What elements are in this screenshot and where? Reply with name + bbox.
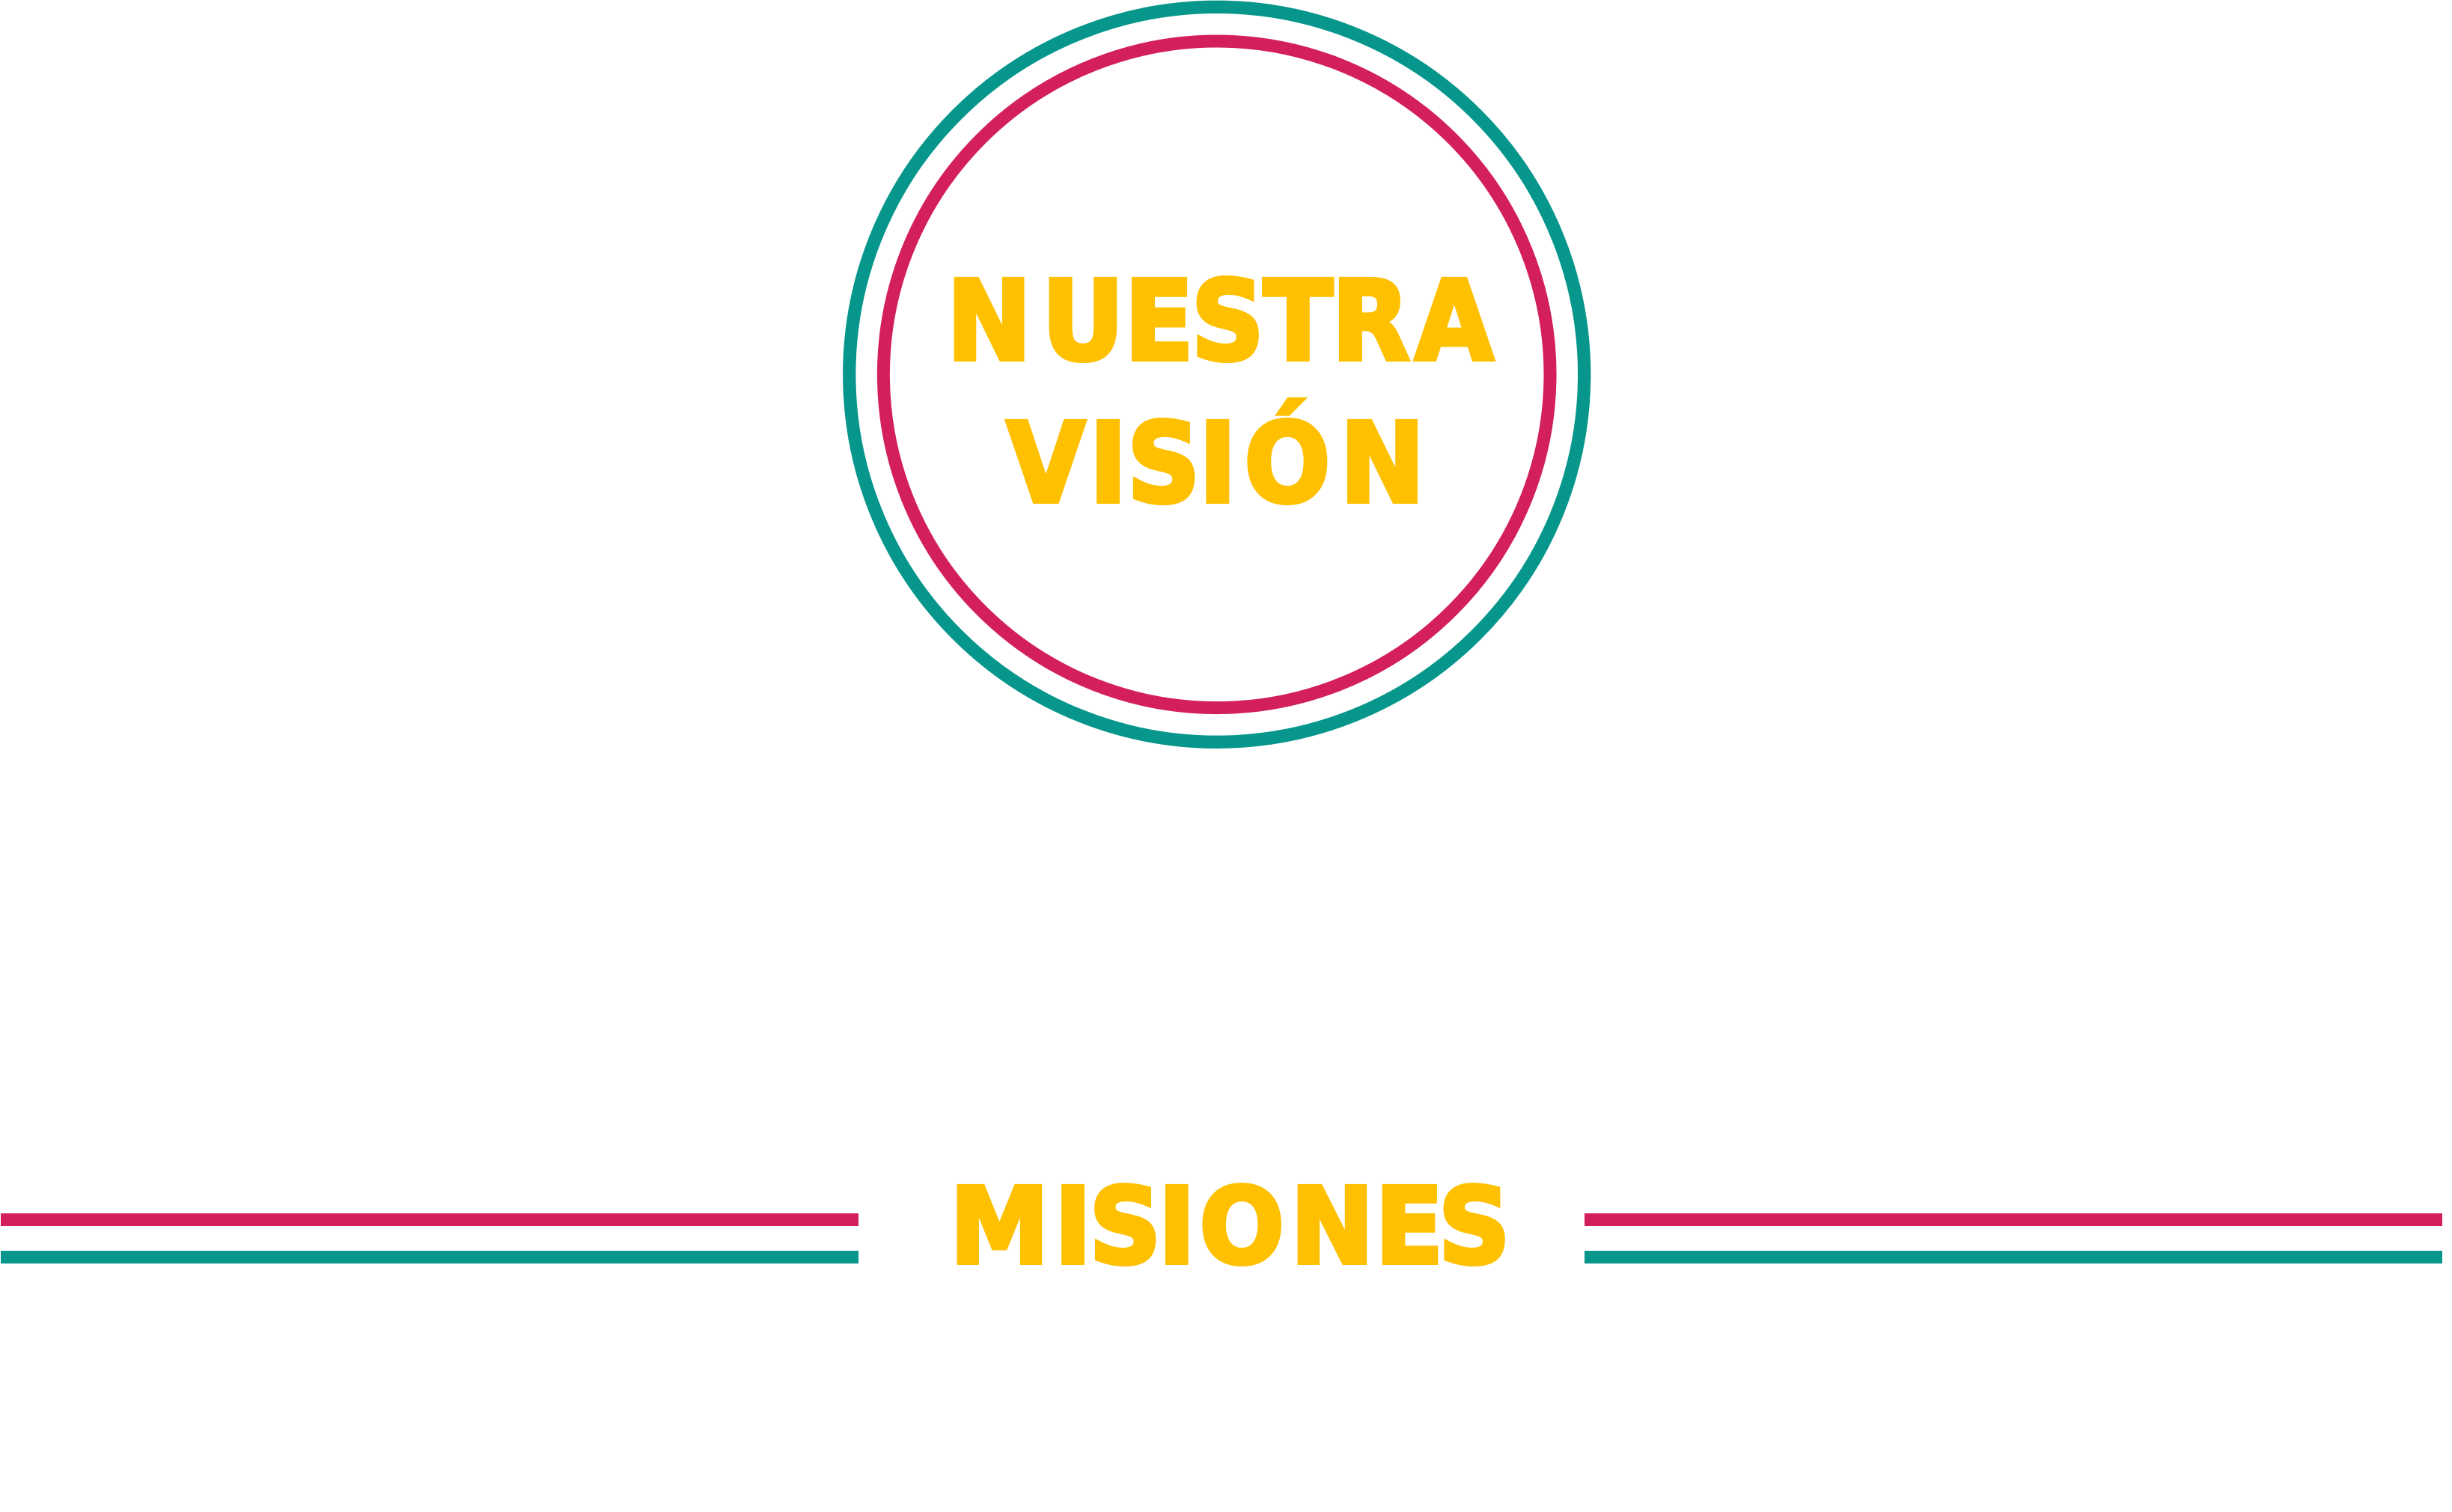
heading: nuestra visión <box>947 258 1493 528</box>
vision badge <box>850 7 1585 742</box>
missions section header <box>1 1166 2442 1288</box>
left double rule <box>1 1213 858 1263</box>
heading: misiones: MISIONES <box>950 1166 1510 1288</box>
heading line: nuestra: NUESTRA <box>947 258 1493 385</box>
right double rule <box>1585 1213 2442 1263</box>
heading line: visión: VISIÓN <box>1007 400 1424 528</box>
outer teal ring <box>850 7 1585 742</box>
inner pink ring <box>883 41 1550 708</box>
